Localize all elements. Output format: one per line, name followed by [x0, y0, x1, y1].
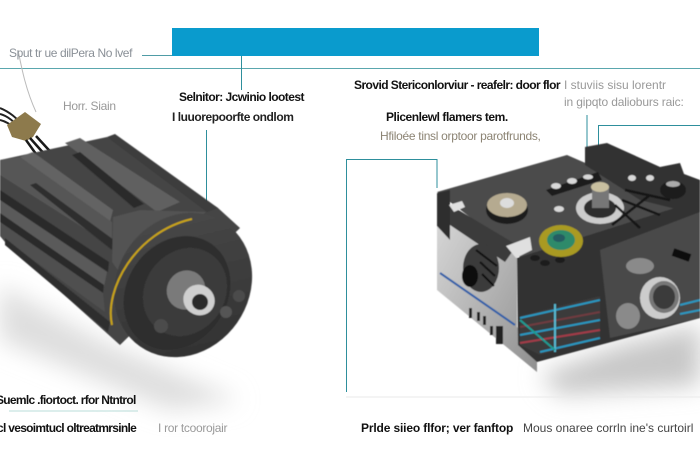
- device top face: [437, 155, 700, 290]
- text: small label: Horr. Siain: [63, 99, 116, 113]
- device back block: [585, 143, 700, 215]
- side slots: [469, 308, 503, 344]
- front chrome port: [640, 277, 680, 319]
- connector lines and frames: [0, 56, 700, 411]
- text: device note: I stuviis sisu lorentr: [564, 78, 666, 92]
- text: bottom right heading: Prlde siieo flfor; ver fanftop: [361, 421, 513, 435]
- top gears: [486, 196, 528, 224]
- ground shadows: [0, 285, 700, 410]
- device front face: [517, 200, 700, 362]
- device: [437, 143, 700, 372]
- corner highlights: [449, 201, 532, 258]
- text: top left note: Sput tr ue dilPera No lvef: [9, 46, 132, 60]
- text: bottom left subheading: cl vesoimtucl oltreatmrsinle: [0, 421, 136, 435]
- motor fins: [0, 134, 218, 332]
- motor body: [0, 137, 240, 345]
- top slot details: [546, 172, 654, 212]
- side gear: [463, 244, 499, 292]
- text: bottom right note: Mous onaree corrln ine's curtoirl: [523, 421, 693, 435]
- motor end cap: [86, 186, 280, 384]
- yellow ring: [111, 219, 192, 325]
- front buttons: [530, 255, 565, 266]
- header bar: [172, 28, 539, 56]
- icon: motor cable: [0, 50, 58, 168]
- blue side line: [440, 273, 515, 325]
- device silver side: [437, 192, 537, 372]
- front gears: [616, 258, 654, 329]
- motor screws: [154, 319, 168, 333]
- text: motor heading: Selnitor: Jcwinio lootest: [179, 90, 304, 104]
- text: device subheading: Plicenlewl flamers tem.: [386, 110, 508, 124]
- motor shaft: [159, 263, 213, 317]
- text: device caption: Hfiloée tinsl orptoor parotfrunds,: [380, 129, 541, 143]
- striped layers: [520, 296, 700, 355]
- text: device heading: Srovid Stericonlorviur - reafelr: door flor: [354, 78, 560, 92]
- motor: [0, 134, 280, 384]
- text: motor subheading: I luuorepoorfte ondlom: [172, 110, 293, 124]
- text: bottom left note: I ror tcoorojair: [158, 421, 227, 435]
- motor shoulder: [112, 210, 206, 280]
- text: device note line two: in gipqto dalioburs raic:: [564, 95, 684, 109]
- colourful gear: [539, 225, 583, 257]
- text: bottom left heading: Suemlc .fiortoct. rfor Ntntrol: [0, 393, 136, 407]
